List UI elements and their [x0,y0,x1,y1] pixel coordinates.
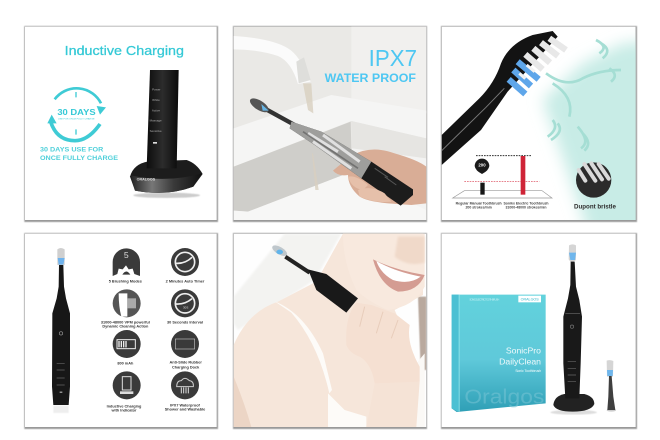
panel: inductive charging [24,26,218,222]
icon: 30 days charge cycle: USE FOR ONCE FULLY CHARGE [58,117,95,120]
label: charging dock: Anti-Slide Rubber [170,361,202,365]
toothbrush head [442,31,558,165]
label: battery capacity: 800 mAh [117,362,134,366]
label: 30 seconds interval: 30 Seconds Interval [167,320,203,324]
icon: 5 brushing modes: 5 [124,250,129,260]
label: dynamic cleaning action: Dynamic Cleaning Action [102,324,149,328]
product box: Sonic Toothbrush [515,369,541,373]
strokes comparison chart: Regular Manual Toothbrush [456,202,502,206]
bristles [509,38,566,94]
strokes comparison chart: Sonikx Electric Toothbrush [503,202,549,206]
faucet [234,36,311,84]
toothbrush on charging dock: ORALGOS [137,178,156,182]
icon: 30 seconds interval [171,289,199,317]
product box [452,295,546,412]
icon: 2 minutes timer [171,248,199,276]
spare brush head [607,360,616,412]
toothbrush on stand [550,244,597,415]
heading: water proof: WATER PROOF [325,71,416,85]
fingers [348,176,391,202]
nose shadow [395,237,425,264]
toothbrush full view [52,248,70,413]
icon: 5 brushing modes [113,248,140,276]
water stream [303,83,319,190]
heading: inductive charging: Inductive Charging [65,44,184,58]
label: charging dock: Charging Dock [172,365,200,369]
toothbrush under water [248,96,413,206]
panel: IPX7 water proof photo [233,26,427,222]
label: dynamic cleaning action [101,320,150,328]
icon: dupont bristle [576,162,611,198]
water swirl [546,40,621,151]
strokes comparison chart: 200 strokes/min [465,205,492,209]
dark strip at right [418,297,426,370]
toothbrush on charging dock [130,70,203,198]
strokes comparison chart: 200 [478,163,486,168]
icon: dynamic cleaning action [113,289,141,317]
product box: DailyClean [499,357,541,367]
panel: smiling woman photo [233,233,427,429]
hand [333,150,426,205]
product box: SonicPro [506,345,541,355]
icon: 30 days charge cycle: 30 DAYS [57,108,96,117]
product box: Oralgos [464,386,544,408]
panel: product box and toothbrush [441,233,637,429]
text: thirty days use: ONCE FULLY CHARGE [40,155,119,162]
strokes comparison chart [453,156,552,209]
label: 5 brushing modes: 5 Brushing Modes [109,279,142,283]
icon: 30 seconds interval: 30S [183,306,188,310]
toothbrush [271,243,358,313]
label: inductive charging indicator: with Indicator [111,408,137,412]
heading: IPX7: IPX7 [369,45,417,71]
icon: inductive charging indicator [113,371,141,399]
teal water glow [538,35,636,220]
body skin [234,234,423,427]
label: waterproof shower [165,403,205,411]
label: inductive charging indicator: Inductive Charging [107,404,142,408]
toothbrush on charging dock: Massage [150,118,162,122]
icon: charging dock [171,330,199,358]
sink basin [234,95,426,220]
label: waterproof shower: Shower and Washable [165,407,205,411]
product box: ORALGOS [521,297,539,301]
label: waterproof shower: IPX7 Waterproof [170,403,201,407]
toothbrush on charging dock: Active [152,108,160,112]
label: charging dock [170,361,202,369]
hand [396,315,420,382]
label: inductive charging indicator [107,404,142,412]
panel: bristle and strokes chart [440,26,638,222]
panel: feature specifications [24,233,218,429]
icon: 30 days charge cycle [47,88,106,141]
text: thirty days use [40,147,119,162]
camisole strap and top [275,301,366,427]
text: thirty days use: 30 DAYS USE FOR [40,147,104,154]
icon: battery [113,330,141,358]
toothbrush on charging dock: White [152,98,160,102]
toothbrush on charging dock: Sensitive [150,129,162,133]
label: 2 minutes timer: 2 Minutes Auto Timer [166,279,205,283]
smile [373,259,425,292]
label: dynamic cleaning action: 31000-48000 VPM powerful [101,320,150,324]
white fabric background [234,234,341,330]
icon: waterproof shower [171,371,199,399]
label: dupont bristle: Dupont bristle [574,205,617,211]
strokes comparison chart: 31000-48000 strokes/min [505,205,547,209]
product box: SONIC ELECTRIC TOOTHBRUSH [469,298,499,302]
toothbrush on charging dock: Power [152,87,161,91]
